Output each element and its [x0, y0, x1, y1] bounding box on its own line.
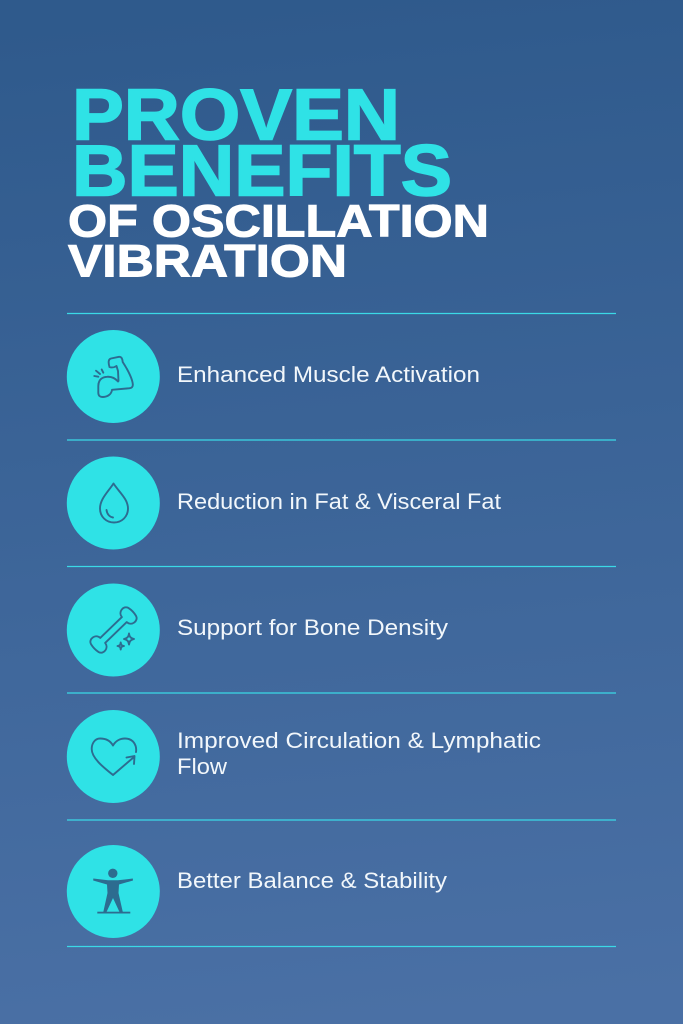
heading: proven benefits — [72, 76, 452, 212]
label: Improved Circulation & Lymphatic — [177, 728, 541, 753]
icon: heart with arrow — [67, 710, 160, 803]
label: Enhanced Muscle Activation — [177, 362, 480, 387]
label: Reduction in Fat & Visceral Fat — [177, 489, 501, 514]
label: Flow — [177, 754, 227, 779]
icon: balancing figure — [67, 845, 160, 938]
heading: proven benefits: BENEFITS — [72, 132, 452, 212]
heading: proven benefits: PROVEN — [72, 76, 400, 156]
label — [177, 728, 541, 779]
row: circulation — [67, 710, 541, 803]
heading: of oscillation vibration: OF OSCILLATION — [68, 196, 489, 246]
icon: flexed muscle — [67, 330, 160, 423]
icon: bone with sparkles — [67, 584, 160, 676]
heading: of oscillation vibration: VIBRATION — [68, 236, 347, 286]
label: Support for Bone Density — [177, 615, 448, 640]
row: balance — [67, 845, 447, 938]
label: Better Balance & Stability — [177, 868, 447, 893]
title — [68, 76, 489, 286]
row: bone density — [67, 584, 448, 676]
row: enhanced muscle activation — [67, 330, 480, 423]
heading: of oscillation vibration — [68, 196, 489, 286]
icon: water drop — [67, 456, 160, 550]
row: reduction in fat — [67, 456, 501, 550]
